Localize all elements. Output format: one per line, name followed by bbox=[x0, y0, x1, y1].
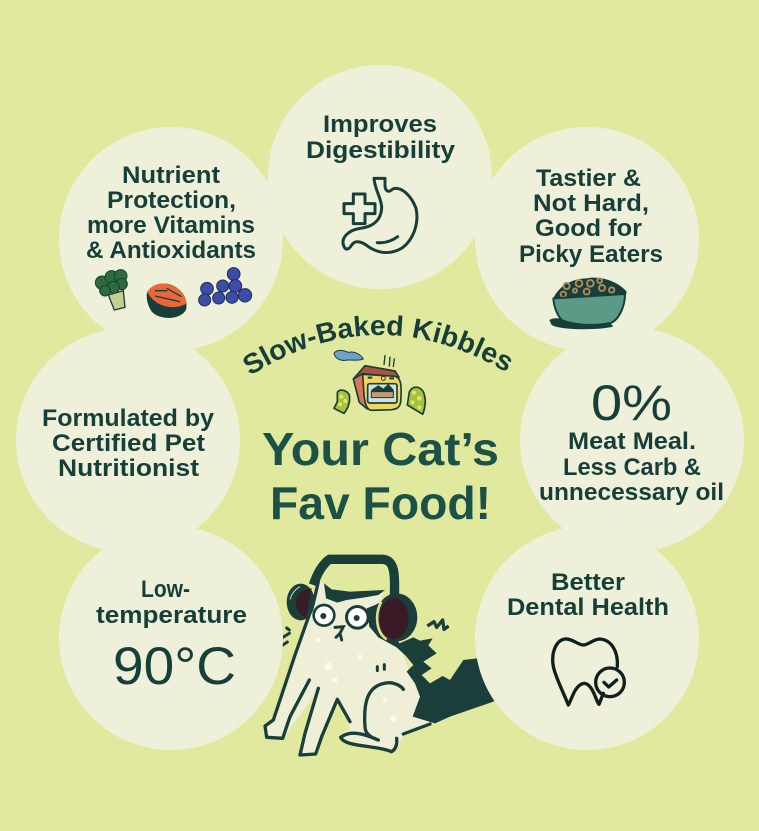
heading: improves digestibility: Digestibility bbox=[306, 137, 456, 164]
heading: tastier: Picky Eaters bbox=[519, 241, 663, 268]
panel: certified nutritionist bbox=[16, 328, 240, 552]
icon: bowl of kibble bbox=[549, 278, 627, 329]
heading: better dental health bbox=[507, 569, 669, 621]
panel: low temperature bbox=[59, 526, 283, 750]
text: meat meal, less carb and oil bbox=[539, 428, 724, 506]
subtitle: slow-baked kibbles: Slow-Baked Kibbles bbox=[244, 315, 512, 374]
text: formulated by certified pet nutritionist: Certified Pet bbox=[52, 430, 205, 457]
fur patch and tail bbox=[367, 602, 503, 723]
panel: nutrient protection bbox=[59, 127, 283, 351]
text: low temperature: Low- bbox=[141, 576, 190, 603]
text: meat meal, less carb and oil: unnecessary oil bbox=[539, 479, 724, 506]
heading: tastier bbox=[519, 165, 663, 268]
text: meat meal, less carb and oil: Less Carb & bbox=[563, 454, 701, 481]
icon: salmon steak bbox=[147, 283, 187, 318]
heading: better dental health: Dental Health bbox=[507, 594, 669, 621]
title: your cat's fav food: Fav Food! bbox=[270, 477, 491, 529]
fur speckles bbox=[316, 638, 396, 721]
heading: nutrient protection: more Vitamins bbox=[87, 212, 255, 239]
heading: nutrient protection: Nutrient bbox=[122, 162, 220, 189]
number: 0%: 0% bbox=[591, 375, 672, 431]
panel: improves digestibility bbox=[268, 65, 492, 289]
icon: stomach with plus bbox=[343, 178, 417, 253]
heading: better dental health: Better bbox=[551, 569, 625, 596]
smoke bbox=[334, 350, 363, 360]
text: meat meal, less carb and oil: Meat Meal. bbox=[568, 428, 696, 455]
heading: tastier: Good for bbox=[535, 215, 642, 242]
text: formulated by certified pet nutritionist: Nutritionist bbox=[58, 455, 199, 482]
text: low temperature: temperature bbox=[96, 602, 247, 629]
panel: dental health bbox=[475, 526, 699, 750]
left ear cup bbox=[287, 584, 315, 620]
text: formulated by certified pet nutritionist: Formulated by bbox=[42, 405, 215, 432]
icon: broccoli bbox=[95, 270, 127, 310]
heading: nutrient protection: Protection, bbox=[107, 187, 236, 214]
cat body bbox=[264, 581, 432, 755]
text: formulated by certified pet nutritionist bbox=[42, 405, 215, 482]
heading: nutrient protection bbox=[86, 162, 256, 264]
headband bbox=[313, 559, 395, 602]
icon: tooth with check bbox=[553, 639, 624, 705]
heading: tastier: Tastier & bbox=[536, 165, 641, 192]
heading: nutrient protection: & Antioxidants bbox=[86, 237, 256, 264]
outlines bbox=[265, 582, 430, 755]
eyes bbox=[312, 604, 336, 627]
icon: blueberries bbox=[199, 268, 252, 306]
right ear cup bbox=[376, 593, 417, 641]
oven mitts bbox=[334, 387, 425, 414]
heading: tastier: Not Hard, bbox=[533, 190, 649, 217]
title: your cat's fav food bbox=[262, 423, 499, 529]
icons: broccoli, salmon, blueberries bbox=[95, 268, 252, 318]
head cap bbox=[324, 583, 385, 603]
panel: zero percent meat meal bbox=[520, 328, 744, 552]
title: your cat's fav food: Your Cat’s bbox=[262, 423, 499, 475]
icon: oven with mitts bbox=[334, 350, 425, 414]
number: 90°C: 90°C bbox=[113, 637, 236, 696]
panel: tastier, good for picky eaters bbox=[475, 127, 699, 351]
heading: improves digestibility bbox=[306, 111, 456, 164]
face and fur marks bbox=[279, 627, 384, 671]
text: low temperature bbox=[96, 576, 247, 629]
oven body bbox=[353, 366, 399, 379]
heading: improves digestibility: Improves bbox=[323, 111, 437, 138]
illustration: cat with headphones bbox=[264, 559, 503, 755]
